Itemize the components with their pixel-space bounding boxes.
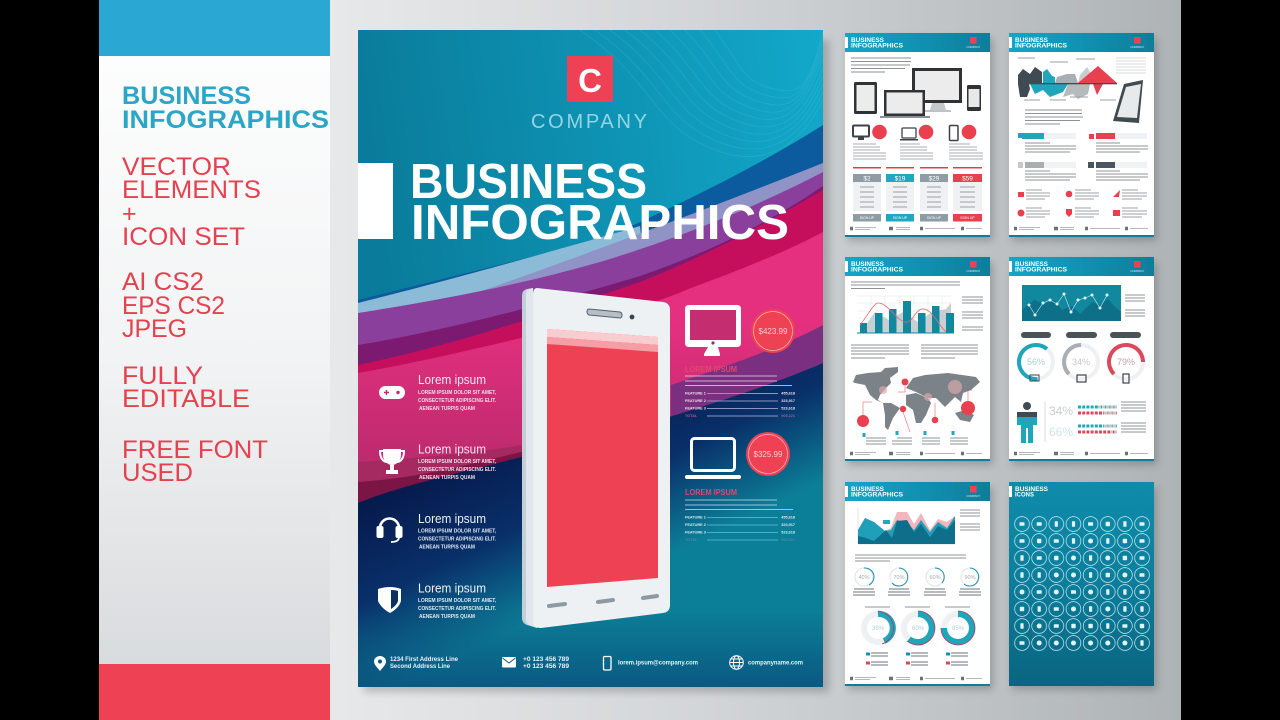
page header: BUSINESS <box>1015 261 1048 268</box>
product spec block 2: 523,618 <box>781 530 795 534</box>
product spec block 1: 905,221 <box>781 414 795 418</box>
page header <box>1009 33 1154 52</box>
poster title: BUSINESS <box>410 155 647 209</box>
feature: game controller: AENEAN TURPIS QUAM <box>419 406 475 412</box>
left sidebar panel <box>99 0 330 720</box>
gauge 79%: 79% <box>1117 357 1135 367</box>
page footer <box>845 678 990 686</box>
page header <box>845 257 990 276</box>
sidebar feature list: ICON SET <box>122 223 245 251</box>
poster background bands <box>358 30 823 687</box>
feature: headset: Lorem ipsum <box>418 512 486 526</box>
product spec block 2: LOREM IPSUM <box>685 488 737 497</box>
pricing cards: $59 <box>962 176 973 182</box>
address <box>390 656 458 670</box>
product spec block 2: 455,618 <box>781 516 795 520</box>
icon: map pin <box>374 656 386 671</box>
icon rows <box>1018 190 1147 217</box>
feature: headset <box>376 512 497 550</box>
gauge values: 60% <box>929 575 941 581</box>
feature: shield <box>378 582 497 620</box>
icon: shield <box>378 587 401 613</box>
gauge 34%: 34% <box>1072 357 1090 367</box>
phone numbers: +0 123 456 789 <box>523 663 569 670</box>
person figure <box>1017 402 1037 443</box>
icon: laptop <box>685 438 741 479</box>
percent rows <box>1018 133 1148 180</box>
bar chart <box>857 296 983 334</box>
feature: trophy: Lorem ipsum <box>418 442 486 456</box>
page header: COMPANY <box>966 494 980 498</box>
product spec block 1: FEATURE 3 <box>685 406 706 410</box>
thumbnail page 1: devices and pricing <box>845 33 990 237</box>
thumbnail page 4: gauges and people statistics <box>1009 257 1154 461</box>
page header: INFOGRAPHICS <box>851 42 903 50</box>
feature: shield: AENEAN TURPIS QUAM <box>419 614 475 620</box>
thumbnail page 5: area chart and donuts <box>845 482 990 686</box>
thumbnail page 2: process diagram and percent rows <box>1009 33 1154 237</box>
website: companyname.com <box>748 660 803 666</box>
page header: INFOGRAPHICS <box>851 266 903 274</box>
line chart panel <box>1022 285 1145 321</box>
icon: globe <box>730 656 743 669</box>
product spec block 1: LOREM IPSUM <box>685 365 737 374</box>
page header <box>845 482 990 501</box>
product spec block 1 <box>685 365 795 418</box>
donut legends <box>866 653 968 665</box>
feature: trophy: LOREM IPSUM DOLOR SIT AMET, <box>418 459 497 465</box>
page header: INFOGRAPHICS <box>851 492 903 498</box>
donut charts <box>864 607 975 645</box>
pricing cards: $2 <box>863 176 871 182</box>
phone speaker <box>587 309 622 318</box>
page header <box>845 33 990 52</box>
process infographic <box>1018 58 1117 100</box>
company name: COMPANY <box>531 111 647 133</box>
gauge 56%: 56% <box>1027 357 1045 367</box>
product spec block 1: 323,917 <box>781 399 795 403</box>
pricing cards: $19 <box>895 176 906 182</box>
product spec block 1: FEATURE 1 <box>685 392 706 396</box>
pricing cards: $29 <box>929 176 940 182</box>
red bottom block <box>99 664 330 720</box>
icon: mobile <box>604 656 611 670</box>
icon page title <box>1015 486 1048 498</box>
price badge $325.99 <box>746 432 790 476</box>
gauge values: 40% <box>858 575 870 581</box>
price badge $423.99 <box>751 309 795 353</box>
page footer <box>1009 452 1154 461</box>
product spec block 1: 455,618 <box>781 392 795 396</box>
page footer <box>845 228 990 237</box>
category pills <box>1021 332 1141 338</box>
gauge values: 70% <box>893 575 905 581</box>
feature: trophy: CONSECTETUR ADIPISCING ELIT. <box>418 467 497 473</box>
small gauges <box>855 568 979 586</box>
icon page title: ICONS <box>1015 492 1034 498</box>
title marker block <box>358 163 393 239</box>
sidebar feature list: + <box>122 200 137 228</box>
icon page title: BUSINESS <box>1015 486 1048 493</box>
tilted phone <box>1113 80 1143 123</box>
phone screen <box>547 329 658 587</box>
sidebar feature list: FULLY <box>122 362 203 390</box>
page header: COMPANY <box>966 269 980 273</box>
feature: shield: CONSECTETUR ADIPISCING ELIT. <box>418 606 497 612</box>
product spec block 1: TOTAL <box>685 414 698 418</box>
pricing cards <box>853 168 982 222</box>
page header: COMPANY <box>1130 269 1144 273</box>
poster title: INFOGRAPHICS <box>411 196 789 250</box>
icon grid <box>1013 516 1151 652</box>
poster title <box>410 155 789 250</box>
footer contact bar <box>374 656 803 671</box>
page header: BUSINESS <box>851 486 884 493</box>
sidebar feature list: FREE FONT <box>122 436 268 464</box>
feature: trophy: AENEAN TURPIS QUAM <box>419 475 475 481</box>
sidebar feature list: EPS CS2 <box>122 292 225 320</box>
page shadows <box>364 38 1157 692</box>
thumbnail page 6: icon set <box>1009 482 1154 686</box>
address: Second Address Line <box>390 663 450 670</box>
gauge values <box>858 575 976 581</box>
feature: shield: Lorem ipsum <box>418 582 486 596</box>
icon: trophy <box>380 449 404 474</box>
email: lorem.ipsum@company.com <box>618 660 698 666</box>
icon page marker <box>1009 486 1012 497</box>
sidebar feature list: ELEMENTS <box>122 176 261 204</box>
world map <box>853 367 980 430</box>
product spec block 2: FEATURE 3 <box>685 530 706 534</box>
gauge captions <box>853 589 981 595</box>
sidebar feature list: VECTOR <box>122 153 231 181</box>
pricing cards: SIGN UP <box>960 216 975 220</box>
icon: envelope <box>502 657 516 668</box>
page footer <box>1009 228 1154 237</box>
area chart <box>858 508 980 544</box>
gauge 56% <box>1012 338 1056 383</box>
map highlight regions <box>879 380 962 401</box>
pricing cards: SIGN UP <box>860 216 875 220</box>
sidebar feature list: JPEG <box>122 315 187 343</box>
page header: BUSINESS <box>851 261 884 268</box>
icon: headset <box>376 518 402 542</box>
sidebar heading: BUSINESS <box>122 82 251 110</box>
cyan top block <box>99 0 330 56</box>
donut charts: 85% <box>952 626 965 632</box>
feature: headset: LOREM IPSUM DOLOR SIT AMET, <box>418 528 497 534</box>
main poster <box>358 30 823 687</box>
page header: COMPANY <box>1130 45 1144 49</box>
sidebar feature list: EDITABLE <box>122 385 250 413</box>
icon: monitor <box>685 305 741 356</box>
phone buttons <box>549 596 657 606</box>
page header: INFOGRAPHICS <box>1015 42 1067 50</box>
phone numbers <box>523 656 569 670</box>
product spec block 1: 523,618 <box>781 406 795 410</box>
feature: game controller: LOREM IPSUM DOLOR SIT AMET, <box>418 390 497 396</box>
product icons and price badges <box>853 125 983 159</box>
pricing cards: SIGN UP <box>893 216 908 220</box>
pictogram rows <box>1078 402 1146 432</box>
sidebar feature list <box>122 153 268 487</box>
product spec block 2: TOTAL <box>685 538 698 542</box>
feature: trophy <box>380 442 497 481</box>
feature: game controller: CONSECTETUR ADIPISCING ELIT. <box>418 398 497 404</box>
company logo: C <box>578 62 602 99</box>
page header: INFOGRAPHICS <box>1015 266 1067 274</box>
product spec block 2: FEATURE 2 <box>685 523 706 527</box>
people percentages: 66% <box>1049 425 1073 439</box>
gauge 79% <box>1109 345 1143 383</box>
map statistics <box>864 431 968 444</box>
sidebar feature list: AI CS2 <box>122 268 204 296</box>
thumbnail page 3: chart and world map <box>845 257 990 461</box>
sidebar heading <box>122 82 329 134</box>
donut charts: 39% <box>872 626 885 632</box>
map markers <box>857 378 975 432</box>
product spec block 2: FEATURE 1 <box>685 516 706 520</box>
page header: BUSINESS <box>851 37 884 44</box>
gauge 34% <box>1064 345 1098 382</box>
product spec block 2: 323,917 <box>781 523 795 527</box>
page header: COMPANY <box>966 45 980 49</box>
text columns <box>851 345 978 358</box>
feature: game controller <box>379 373 497 412</box>
page header: BUSINESS <box>1015 37 1048 44</box>
feature: game controller: Lorem ipsum <box>418 373 486 387</box>
address: 1234 First Address Line <box>390 656 458 663</box>
people percentages <box>1049 404 1073 439</box>
icon: gamepad <box>379 386 405 399</box>
sidebar heading: INFOGRAPHICS <box>122 106 329 134</box>
feature: shield: LOREM IPSUM DOLOR SIT AMET, <box>418 598 497 604</box>
page footer <box>845 452 990 461</box>
phone numbers: +0 123 456 789 <box>523 656 569 663</box>
page header <box>1009 257 1154 276</box>
feature: headset: AENEAN TURPIS QUAM <box>419 544 475 550</box>
product spec block 2 <box>685 488 795 542</box>
product spec block 2: 905,221 <box>781 538 795 542</box>
feature: headset: CONSECTETUR ADIPISCING ELIT. <box>418 536 497 542</box>
price badge $325.99: $325.99 <box>754 450 783 459</box>
smartphone illustration <box>522 288 670 628</box>
pricing cards: SIGN UP <box>927 216 942 220</box>
company logo <box>567 56 613 102</box>
device illustration <box>854 68 981 118</box>
gauge values: 90% <box>964 575 976 581</box>
sidebar feature list: USED <box>122 459 193 487</box>
people percentages: 34% <box>1049 404 1073 418</box>
price badge $423.99: $423.99 <box>759 327 788 336</box>
donut charts: 60% <box>912 626 925 632</box>
phone camera <box>630 315 634 319</box>
product spec block 1: FEATURE 2 <box>685 399 706 403</box>
